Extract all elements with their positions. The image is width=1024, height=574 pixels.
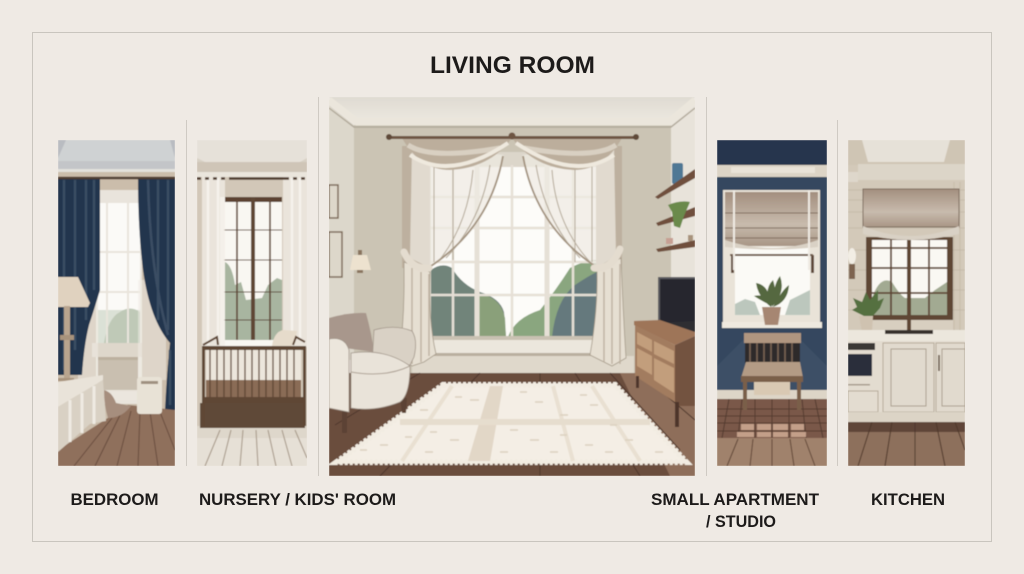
bedroom sheer curtains xyxy=(78,280,166,380)
kitchen wall sconce xyxy=(848,248,856,279)
label: bedroom: BEDROOM xyxy=(70,490,158,509)
kitchen oven and cabinets xyxy=(848,341,965,422)
dresser xyxy=(634,320,695,427)
bedroom floor xyxy=(58,405,175,466)
studio chair xyxy=(741,333,803,395)
living room rug xyxy=(337,385,686,462)
label: nursery: NURSERY / KIDS' ROOM xyxy=(199,490,396,509)
television xyxy=(657,277,695,333)
panel: living room xyxy=(329,97,695,476)
living room floor xyxy=(329,373,695,476)
bedroom navy curtains xyxy=(58,178,175,412)
living room curtain rod xyxy=(386,132,639,140)
kitchen plant xyxy=(852,290,884,332)
kitchen roman shade xyxy=(863,189,959,240)
wall lamp xyxy=(350,250,371,273)
studio tiled floor xyxy=(717,382,827,466)
armchair xyxy=(329,313,416,433)
studio walls xyxy=(717,140,827,410)
label: kitchen: KITCHEN xyxy=(871,490,945,509)
living room ceiling xyxy=(332,97,694,114)
bedroom bench xyxy=(58,375,106,452)
bedroom cushion xyxy=(104,390,131,418)
bedroom window xyxy=(92,190,142,404)
living room curtain swags and sheers xyxy=(402,138,622,270)
panel: bedroom xyxy=(58,140,175,466)
panel: nursery xyxy=(197,140,307,466)
nursery sheer curtains xyxy=(197,177,307,347)
living room window xyxy=(425,152,602,342)
wall pictures xyxy=(329,185,342,277)
bedroom wall and ceiling xyxy=(58,140,175,466)
studio window xyxy=(722,190,822,328)
living room crown molding xyxy=(329,106,695,128)
shelves with decor xyxy=(655,163,695,252)
living room walls xyxy=(329,105,695,375)
title: LIVING ROOM xyxy=(430,52,595,79)
living room window sill and baseboard xyxy=(412,336,634,374)
kitchen ceiling and walls xyxy=(848,140,965,340)
studio roman shade xyxy=(725,190,818,270)
living room lower curtains and tiebacks xyxy=(400,249,626,366)
panel: small apartment studio xyxy=(717,140,827,466)
bedroom lamp xyxy=(58,277,90,381)
label: small apartment studio: / STUDIO xyxy=(706,512,776,531)
label: small apartment studio: SMALL APARTMENT xyxy=(651,490,820,509)
panel: kitchen xyxy=(848,140,965,466)
nursery window xyxy=(220,197,282,347)
nursery floor xyxy=(197,403,307,466)
kitchen countertop and sink xyxy=(848,283,965,341)
kitchen wood floor xyxy=(848,422,965,466)
nursery crib xyxy=(202,330,306,426)
kitchen window xyxy=(866,237,953,330)
studio potted plant xyxy=(754,276,789,325)
bedroom box xyxy=(137,377,162,414)
nursery wall and ceiling xyxy=(197,140,307,426)
